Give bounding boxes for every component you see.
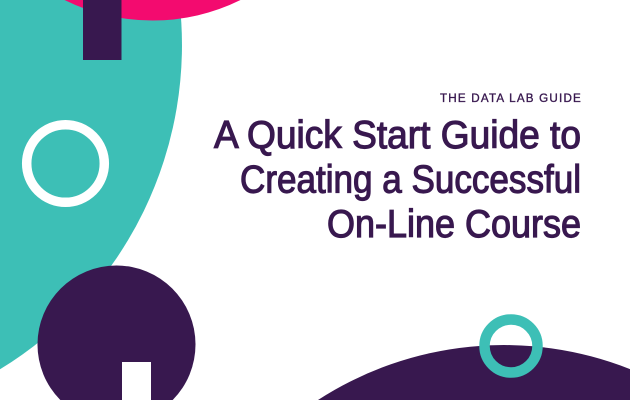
white ring	[27, 125, 104, 202]
title: On-Line Course	[327, 203, 581, 246]
title: A Quick Start Guide to	[214, 114, 581, 157]
teal ring	[484, 320, 538, 372]
title	[214, 114, 581, 246]
purple circle with notch	[37, 265, 195, 400]
teal large circle	[0, 0, 182, 369]
pink circle top	[64, 0, 240, 21]
eyebrow label: THE DATA LAB GUIDE	[440, 93, 582, 105]
purple arc bottom right	[318, 345, 630, 400]
title: Creating a Successful	[240, 158, 581, 202]
purple rectangle top	[83, 0, 122, 60]
